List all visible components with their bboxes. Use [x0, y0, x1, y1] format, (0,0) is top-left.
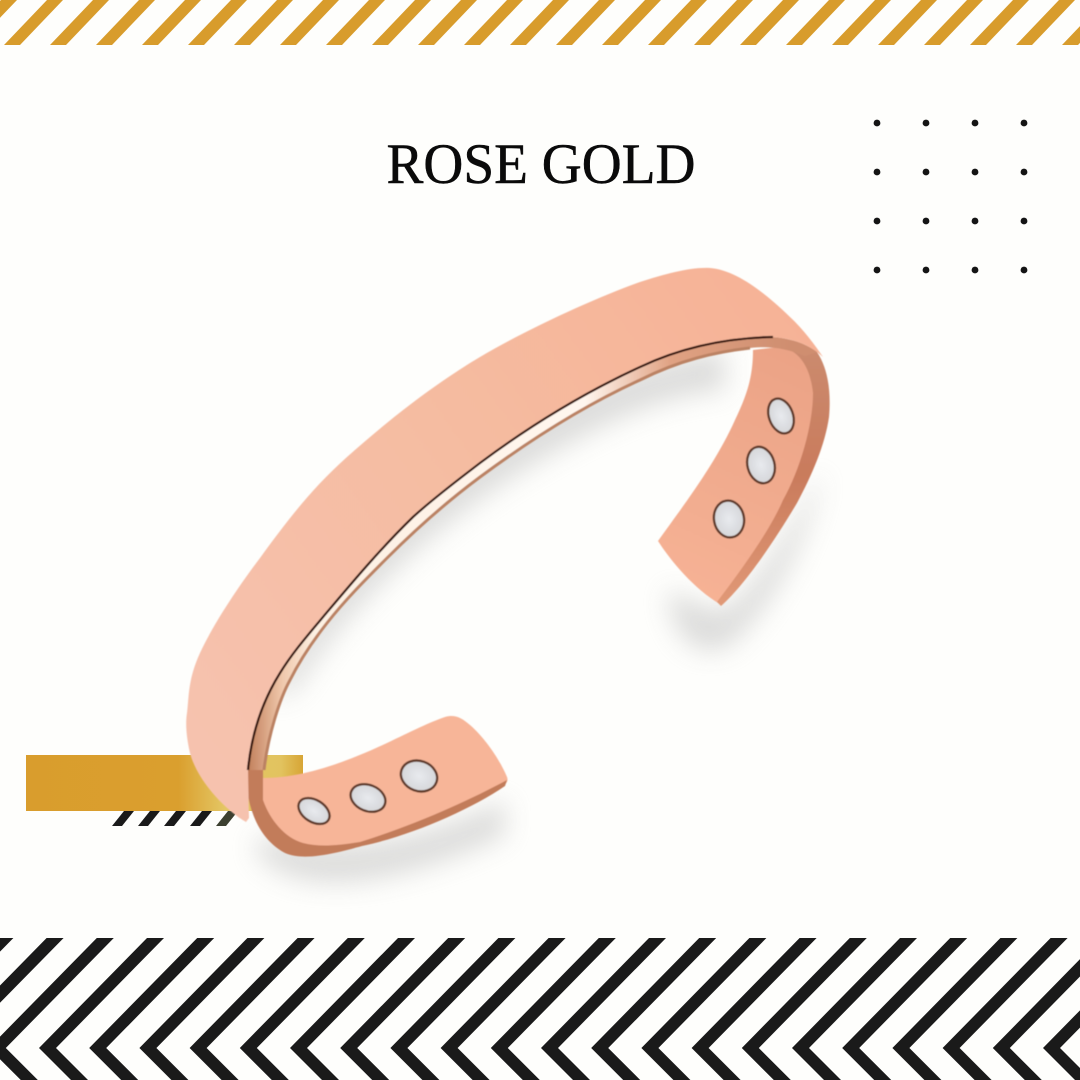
black chevron band	[0, 938, 1080, 1080]
outer face	[186, 268, 823, 822]
right end interior	[658, 345, 816, 604]
rim band	[248, 337, 817, 770]
bracelet shadow	[255, 350, 822, 882]
bracelet	[186, 268, 830, 857]
left magnets	[294, 756, 442, 829]
dot grid	[874, 120, 1027, 273]
right magnets	[711, 395, 798, 540]
rim lower brown edge	[264, 348, 750, 770]
right end rim	[717, 342, 830, 606]
gold accent bar	[26, 755, 303, 811]
title: ROSE GOLD	[386, 133, 696, 196]
gold diagonal stripe band	[0, 0, 1080, 45]
left end interior	[250, 716, 508, 855]
left end rim	[246, 760, 507, 857]
rim dark line	[248, 337, 773, 770]
small black stripes under bar	[112, 811, 238, 826]
